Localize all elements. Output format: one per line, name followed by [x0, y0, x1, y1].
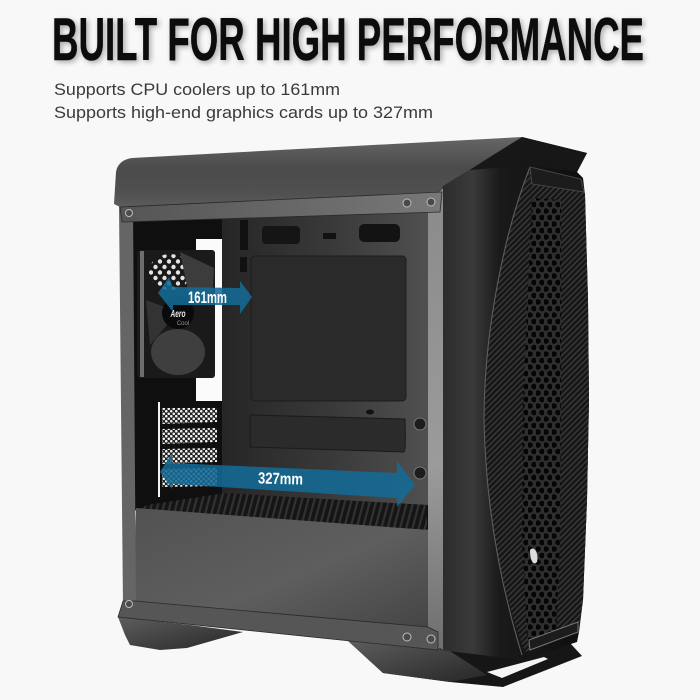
back wall — [222, 212, 428, 505]
fan — [137, 250, 215, 378]
supporting text: Supports high-end graphics cards up to 327mm — [54, 103, 433, 122]
top rail — [120, 192, 442, 222]
screws — [126, 198, 435, 643]
top panel — [114, 137, 522, 207]
supporting text: Supports CPU coolers up to 161mm — [54, 80, 340, 99]
top lip — [470, 137, 587, 172]
lower recess — [250, 415, 405, 452]
bottom mesh floor — [138, 493, 427, 530]
PC case illustration — [114, 137, 589, 687]
cable holes — [262, 226, 300, 244]
left frame — [119, 206, 136, 610]
PSU shroud — [133, 508, 428, 632]
left foot — [118, 617, 243, 650]
fan logo: Aero — [170, 309, 186, 320]
upper recess — [251, 256, 406, 401]
hatched front — [484, 168, 589, 652]
arrow: 161mm cooler clearance — [158, 277, 252, 314]
side panel — [440, 137, 589, 660]
fan upper blade — [180, 252, 214, 305]
fan lower blade — [151, 329, 205, 375]
supporting text — [54, 80, 433, 122]
arrow: 161mm cooler clearance: 161mm — [188, 288, 227, 307]
front bezel top — [530, 167, 584, 192]
right foot — [347, 640, 582, 687]
right frame — [428, 188, 443, 650]
bottom rail — [118, 601, 438, 650]
fan hub — [162, 297, 194, 329]
arrow: 327mm graphics card clearance — [160, 453, 415, 507]
mesh — [522, 198, 561, 647]
white opening — [196, 239, 222, 401]
expansion slots — [158, 402, 217, 497]
interior black — [130, 210, 430, 530]
arrow: 327mm graphics card clearance: 327mm — [258, 470, 303, 489]
logo — [530, 548, 537, 563]
fan: Cool — [177, 321, 189, 327]
standoffs — [414, 418, 426, 430]
front edge highlight — [484, 167, 530, 655]
fan left blade — [146, 300, 178, 345]
front bezel bottom — [529, 622, 578, 650]
fan grille — [149, 254, 191, 290]
